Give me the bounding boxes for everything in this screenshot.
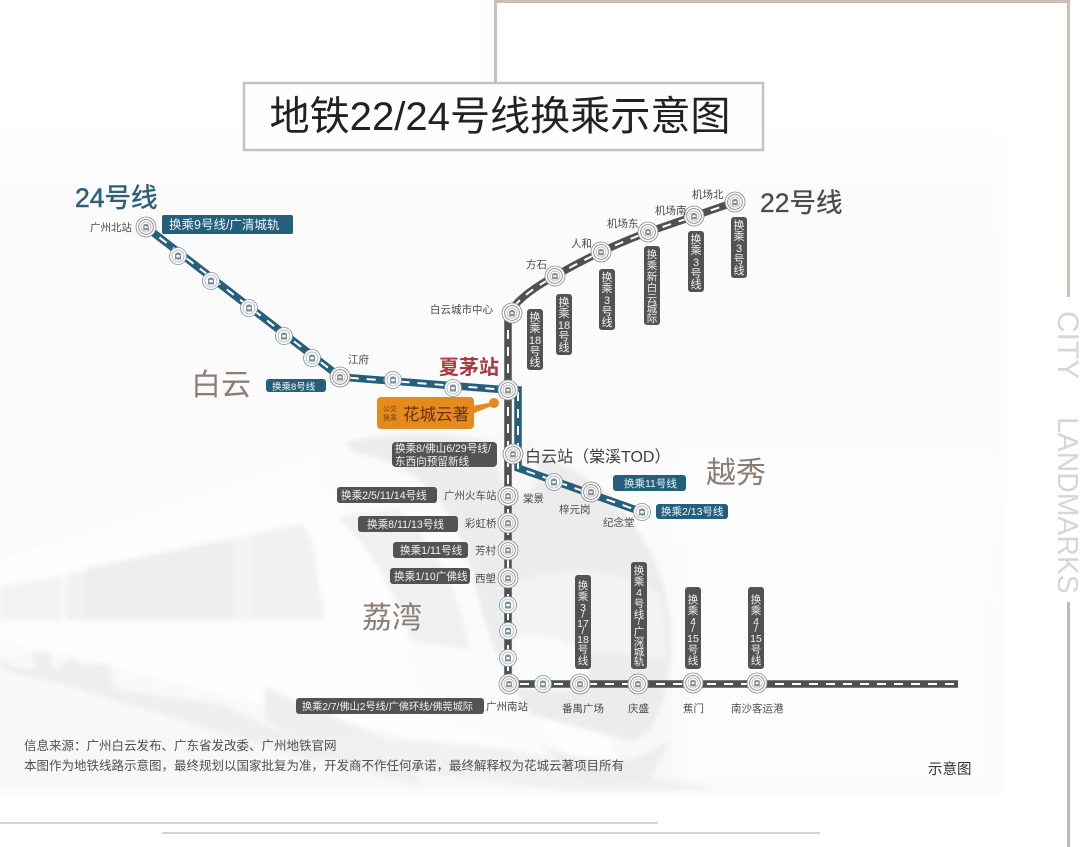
vertical transfer pills, lower [575, 562, 764, 669]
title box: 地铁22/24号线换乘示意图 [270, 95, 730, 139]
station names: 彩虹桥 [465, 518, 497, 530]
vertical transfer pills, upper: 号 [558, 330, 570, 343]
vertical transfer pills, upper: 18 [558, 320, 570, 332]
bottom rule lines [0, 823, 820, 833]
vertical transfer pills, lower: 4 [636, 587, 642, 599]
vertical transfer pills, upper: 乘 [690, 244, 702, 257]
vertical transfer pills, lower: 换 [634, 564, 645, 577]
station names: 江府 [348, 353, 369, 366]
teal transfer pills: 换乘11号线 [624, 477, 677, 490]
vertical transfer pills, lower: 17 [577, 618, 589, 630]
vertical transfer pills, upper: 新 [647, 270, 658, 283]
vertical transfer pills, lower: 号 [751, 644, 761, 656]
vertical transfer pills, lower: 线 [578, 654, 589, 667]
line 22 label: 22号线 [760, 188, 842, 218]
vertical transfer pills, upper: 乘 [558, 307, 570, 320]
grey transfer pills: 换乘2/7/佛山2号线/广佛环线/佛莞城际 [302, 700, 473, 713]
vertical transfer pills, lower: / [692, 623, 695, 635]
grey transfer pills: 换乘8/11/13号线 [367, 518, 444, 531]
grey transfer pills: 换乘1/11号线 [400, 544, 463, 557]
station names: 方石 [526, 258, 547, 271]
source note: 本图作为地铁线路示意图，最终规划以国家批复为准，开发商不作任何承诺，最终解释权为花城云著项目所有 [24, 758, 624, 773]
vertical transfer pills, upper: 换 [690, 232, 702, 246]
project callout: 换乘 [383, 413, 397, 422]
grey transfer pills: 换乘1/10广佛线 [394, 570, 468, 583]
vertical transfer pills, upper: 线 [602, 315, 612, 329]
vertical transfer pills, lower: 18 [577, 634, 589, 646]
Xiamao station heading: 夏茅站 [439, 356, 499, 379]
vertical transfer pills, upper: 线 [558, 340, 570, 354]
vertical transfer pills, lower: 换 [751, 593, 762, 606]
title box [244, 83, 763, 150]
line 24 label: 24号线 [75, 183, 157, 213]
vertical transfer pills, lower: / [638, 616, 641, 628]
station names: 番禺广场 [562, 702, 604, 715]
vertical transfer pills, lower: 号 [578, 644, 588, 656]
vertical transfer pills, lower: 4 [690, 616, 696, 628]
vertical transfer pills, lower: 乘 [634, 576, 645, 588]
station names: 广州北站 [90, 221, 132, 234]
station names: 广州火车站 [444, 489, 497, 502]
district labels: 白云 [191, 369, 251, 402]
station names: 人和 [571, 238, 592, 250]
vertical transfer pills, lower: / [755, 623, 758, 635]
vertical transfer pills, lower: 轨 [634, 655, 645, 668]
vertical transfer pills, lower: / [582, 609, 585, 621]
grey transfer pills: 东西向预留新线 [395, 455, 470, 468]
vertical transfer pills, lower: 3 [580, 602, 586, 614]
project callout [377, 397, 499, 429]
vertical transfer pills, upper: 换 [734, 218, 744, 232]
grey transfer pills: 换乘8/佛山6/29号线/ [395, 442, 491, 455]
vertical transfer pills, upper: 乘 [530, 322, 540, 335]
grey transfer pills [296, 442, 497, 714]
line 22 stations [498, 192, 767, 694]
station names: 白云城市中心 [430, 303, 493, 316]
vertical transfer pills, upper: 号 [530, 345, 540, 358]
station names: 西塱 [475, 572, 496, 585]
source note: 信息来源：广州白云发布、广东省发改委、广州地铁官网 [24, 738, 337, 753]
vertical transfer pills, upper: 白 [647, 281, 657, 294]
teal branch stations [498, 380, 650, 520]
project callout: 花城云著 [403, 405, 469, 424]
vertical transfer pills, lower: 线 [751, 654, 762, 667]
district labels: 越秀 [706, 457, 766, 490]
vertical transfer pills, lower: 乘 [688, 605, 699, 617]
line 22 grey route [508, 202, 958, 684]
station names: 广州南站 [486, 700, 528, 713]
train background illustration [0, 432, 720, 790]
vertical transfer pills, upper: 3 [604, 295, 610, 307]
station names: 芳村 [475, 544, 496, 557]
decorative frame [496, 2, 1068, 847]
station names: 机场北 [692, 188, 724, 201]
teal transfer pills: 换乘2/13号线 [661, 505, 724, 518]
vertical transfer pills, lower: 15 [687, 633, 699, 645]
vertical transfer pills, lower: 号 [688, 644, 698, 656]
district labels [191, 369, 766, 635]
grey transfer pills: 换乘2/5/11/14号线 [341, 489, 427, 502]
vertical transfer pills, upper: 18 [529, 335, 541, 347]
vertical transfer pills, upper: 乘 [647, 260, 658, 272]
vertical transfer pills, lower: 深 [634, 636, 644, 648]
vertical transfer pills, upper: 换 [602, 270, 612, 284]
vertical transfer pills, upper [527, 217, 747, 370]
station names: 梓元岗 [559, 503, 590, 516]
vertical transfer pills, upper: 号 [734, 253, 744, 266]
schematic label: 示意图 [928, 760, 972, 778]
vertical transfer pills, lower: 广 [634, 626, 644, 638]
vertical transfer pills, lower: 乘 [751, 605, 762, 617]
station names: 纪念堂 [603, 516, 634, 529]
vertical transfer pills, upper: 云 [647, 293, 657, 305]
vertical transfer pills, upper: 际 [647, 313, 657, 325]
teal transfer pills: 换乘9号线/广清城轨 [169, 218, 280, 232]
district labels: 荔湾 [362, 602, 422, 635]
vertical transfer pills, upper: 换 [558, 295, 570, 309]
vertical transfer pills, upper: 线 [530, 355, 540, 369]
vertical transfer pills, lower: 号 [634, 598, 644, 610]
station names: 蕉门 [683, 702, 704, 715]
vertical transfer pills, upper: 3 [693, 257, 699, 269]
vertical transfer pills, upper: 乘 [734, 230, 744, 243]
vertical transfer pills, upper: 换 [647, 248, 658, 261]
vertical transfer pills, upper: 3 [736, 243, 742, 255]
vertical transfer pills, lower: 4 [753, 616, 759, 628]
vertical transfer pills, upper: 城 [647, 303, 658, 315]
vertical transfer pills, upper: 线 [690, 277, 702, 291]
station names: 庆盛 [628, 702, 649, 715]
line 24 teal route [146, 227, 642, 512]
station names: 南沙客运港 [731, 702, 784, 715]
teal transfer pills [162, 215, 728, 519]
line 24 stations [136, 217, 462, 396]
vertical transfer pills, upper: 换 [530, 310, 540, 324]
vertical transfer pills, lower: 城 [634, 646, 645, 658]
vertical brand text [1051, 311, 1080, 594]
vertical transfer pills, lower: / [582, 625, 585, 637]
vertical transfer pills, upper: 号 [690, 267, 702, 280]
vertical transfer pills, lower: 换 [578, 579, 589, 592]
station names: 机场南 [655, 204, 686, 217]
vertical transfer pills, lower: 15 [750, 633, 762, 645]
station names: 棠景 [523, 492, 544, 505]
vertical transfer pills, upper: 线 [734, 263, 744, 277]
teal transfer pills: 换乘8号线 [272, 381, 316, 393]
vertical transfer pills, upper: 号 [602, 305, 612, 318]
station names: 机场东 [607, 217, 638, 230]
vertical transfer pills, upper: 乘 [602, 282, 612, 295]
vertical transfer pills, lower: 线 [688, 654, 699, 667]
vertical transfer pills, lower: 线 [634, 608, 645, 621]
station names [90, 188, 784, 715]
vertical transfer pills, lower: 乘 [578, 591, 589, 603]
vertical transfer pills, lower: 换 [688, 593, 699, 606]
Baiyun station heading: 白云站（棠溪TOD） [525, 448, 670, 466]
project callout: 公交 [383, 404, 397, 413]
source note [24, 738, 624, 773]
